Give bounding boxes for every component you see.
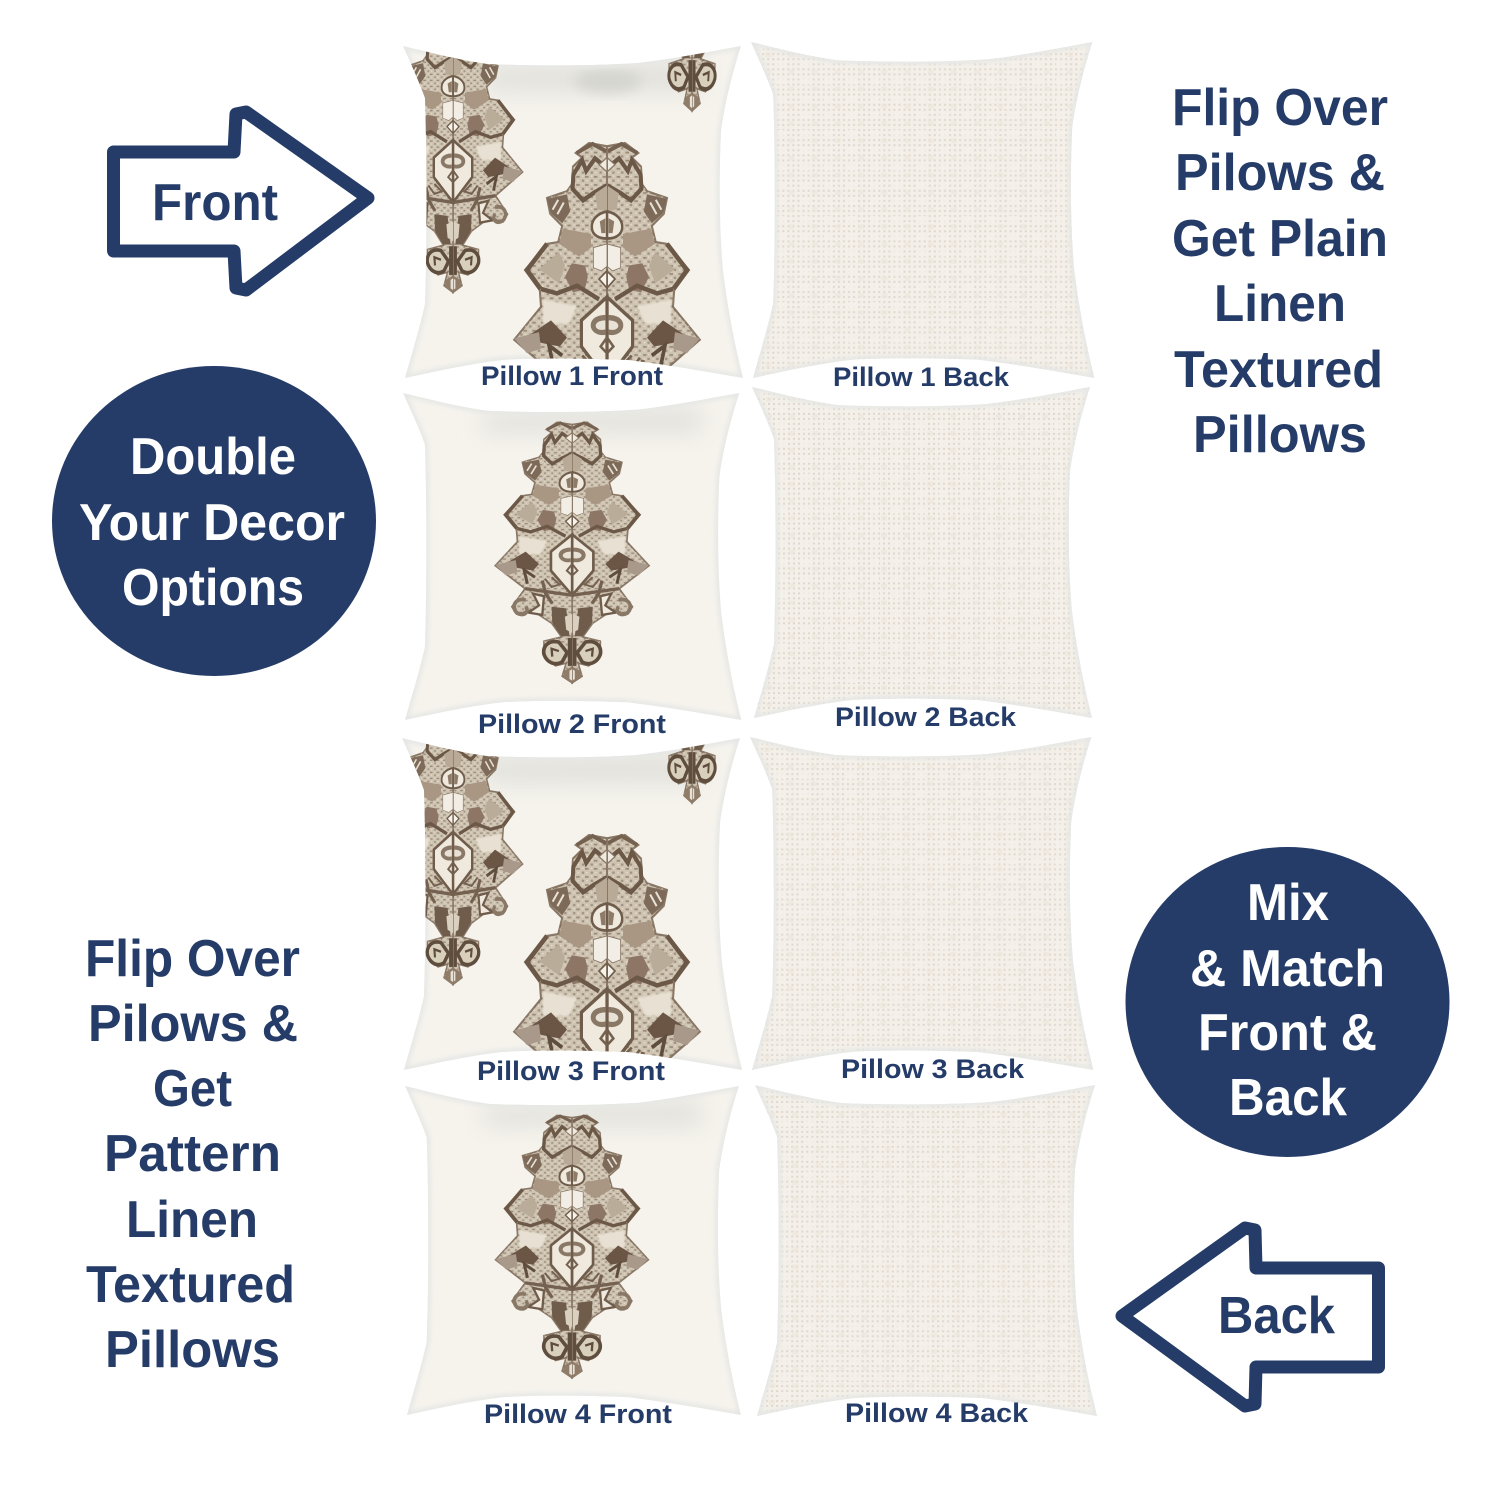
- text block: flip over to pattern linen: Linen: [126, 1191, 258, 1249]
- pillow 3 front: [402, 738, 742, 1070]
- pillow 2 front: [403, 393, 741, 720]
- text block: flip over to pattern linen: Pattern: [104, 1125, 281, 1183]
- pillow 2 back: [752, 387, 1092, 718]
- text block: flip over to pattern linen: Textured: [86, 1256, 295, 1314]
- label: pillow 2 front: Pillow 2 Front: [478, 709, 666, 739]
- callout: double your decor options: Your Decor: [79, 494, 345, 552]
- pillow 3 back: [750, 737, 1093, 1070]
- text block: flip over to plain linen: Pilows &: [1175, 144, 1385, 202]
- text block: flip over to pattern linen: Pilows &: [88, 995, 298, 1053]
- text block: flip over to plain linen: Linen: [1214, 275, 1346, 333]
- text block: flip over to plain linen: Flip Over: [1172, 79, 1388, 137]
- callout: double your decor options: Options: [122, 559, 304, 617]
- text block: flip over to plain linen: Get Plain: [1172, 210, 1388, 268]
- arrow: back: Back: [1218, 1287, 1335, 1345]
- label: pillow 4 back: Pillow 4 Back: [845, 1398, 1029, 1428]
- callout: double your decor options: [52, 366, 376, 676]
- callout: mix and match: Back: [1229, 1069, 1347, 1127]
- text block: flip over to plain linen: Textured: [1174, 341, 1383, 399]
- label: pillow 3 back: Pillow 3 Back: [841, 1054, 1025, 1084]
- label: pillow 3 front: Pillow 3 Front: [477, 1056, 665, 1086]
- callout: double your decor options: Double: [130, 428, 296, 486]
- text block: flip over to plain linen: Pillows: [1193, 406, 1367, 464]
- arrow: front: Front: [152, 174, 278, 232]
- callout: mix and match: Mix: [1247, 874, 1329, 932]
- label: pillow 1 back: Pillow 1 Back: [833, 362, 1010, 392]
- label: pillow 2 back: Pillow 2 Back: [835, 702, 1017, 732]
- text block: flip over to pattern linen: [85, 930, 300, 1379]
- text block: flip over to pattern linen: Flip Over: [85, 930, 300, 988]
- label: pillow 1 front: Pillow 1 Front: [481, 361, 663, 391]
- pillow 4 front: [405, 1086, 741, 1415]
- text block: flip over to plain linen: [1172, 79, 1388, 464]
- callout: mix and match: & Match: [1190, 940, 1385, 998]
- label: pillow 4 front: Pillow 4 Front: [484, 1399, 672, 1429]
- text block: flip over to pattern linen: Pillows: [105, 1321, 280, 1379]
- pillow 1 front: [403, 46, 743, 378]
- callout: mix and match: [1126, 847, 1450, 1157]
- pillow 1 back: [751, 42, 1094, 378]
- text block: flip over to pattern linen: Get: [153, 1060, 232, 1118]
- callout: mix and match: Front &: [1198, 1004, 1377, 1062]
- arrow: back: [1122, 1228, 1378, 1406]
- pillow 4 back: [755, 1085, 1097, 1416]
- arrow: front: [114, 112, 368, 290]
